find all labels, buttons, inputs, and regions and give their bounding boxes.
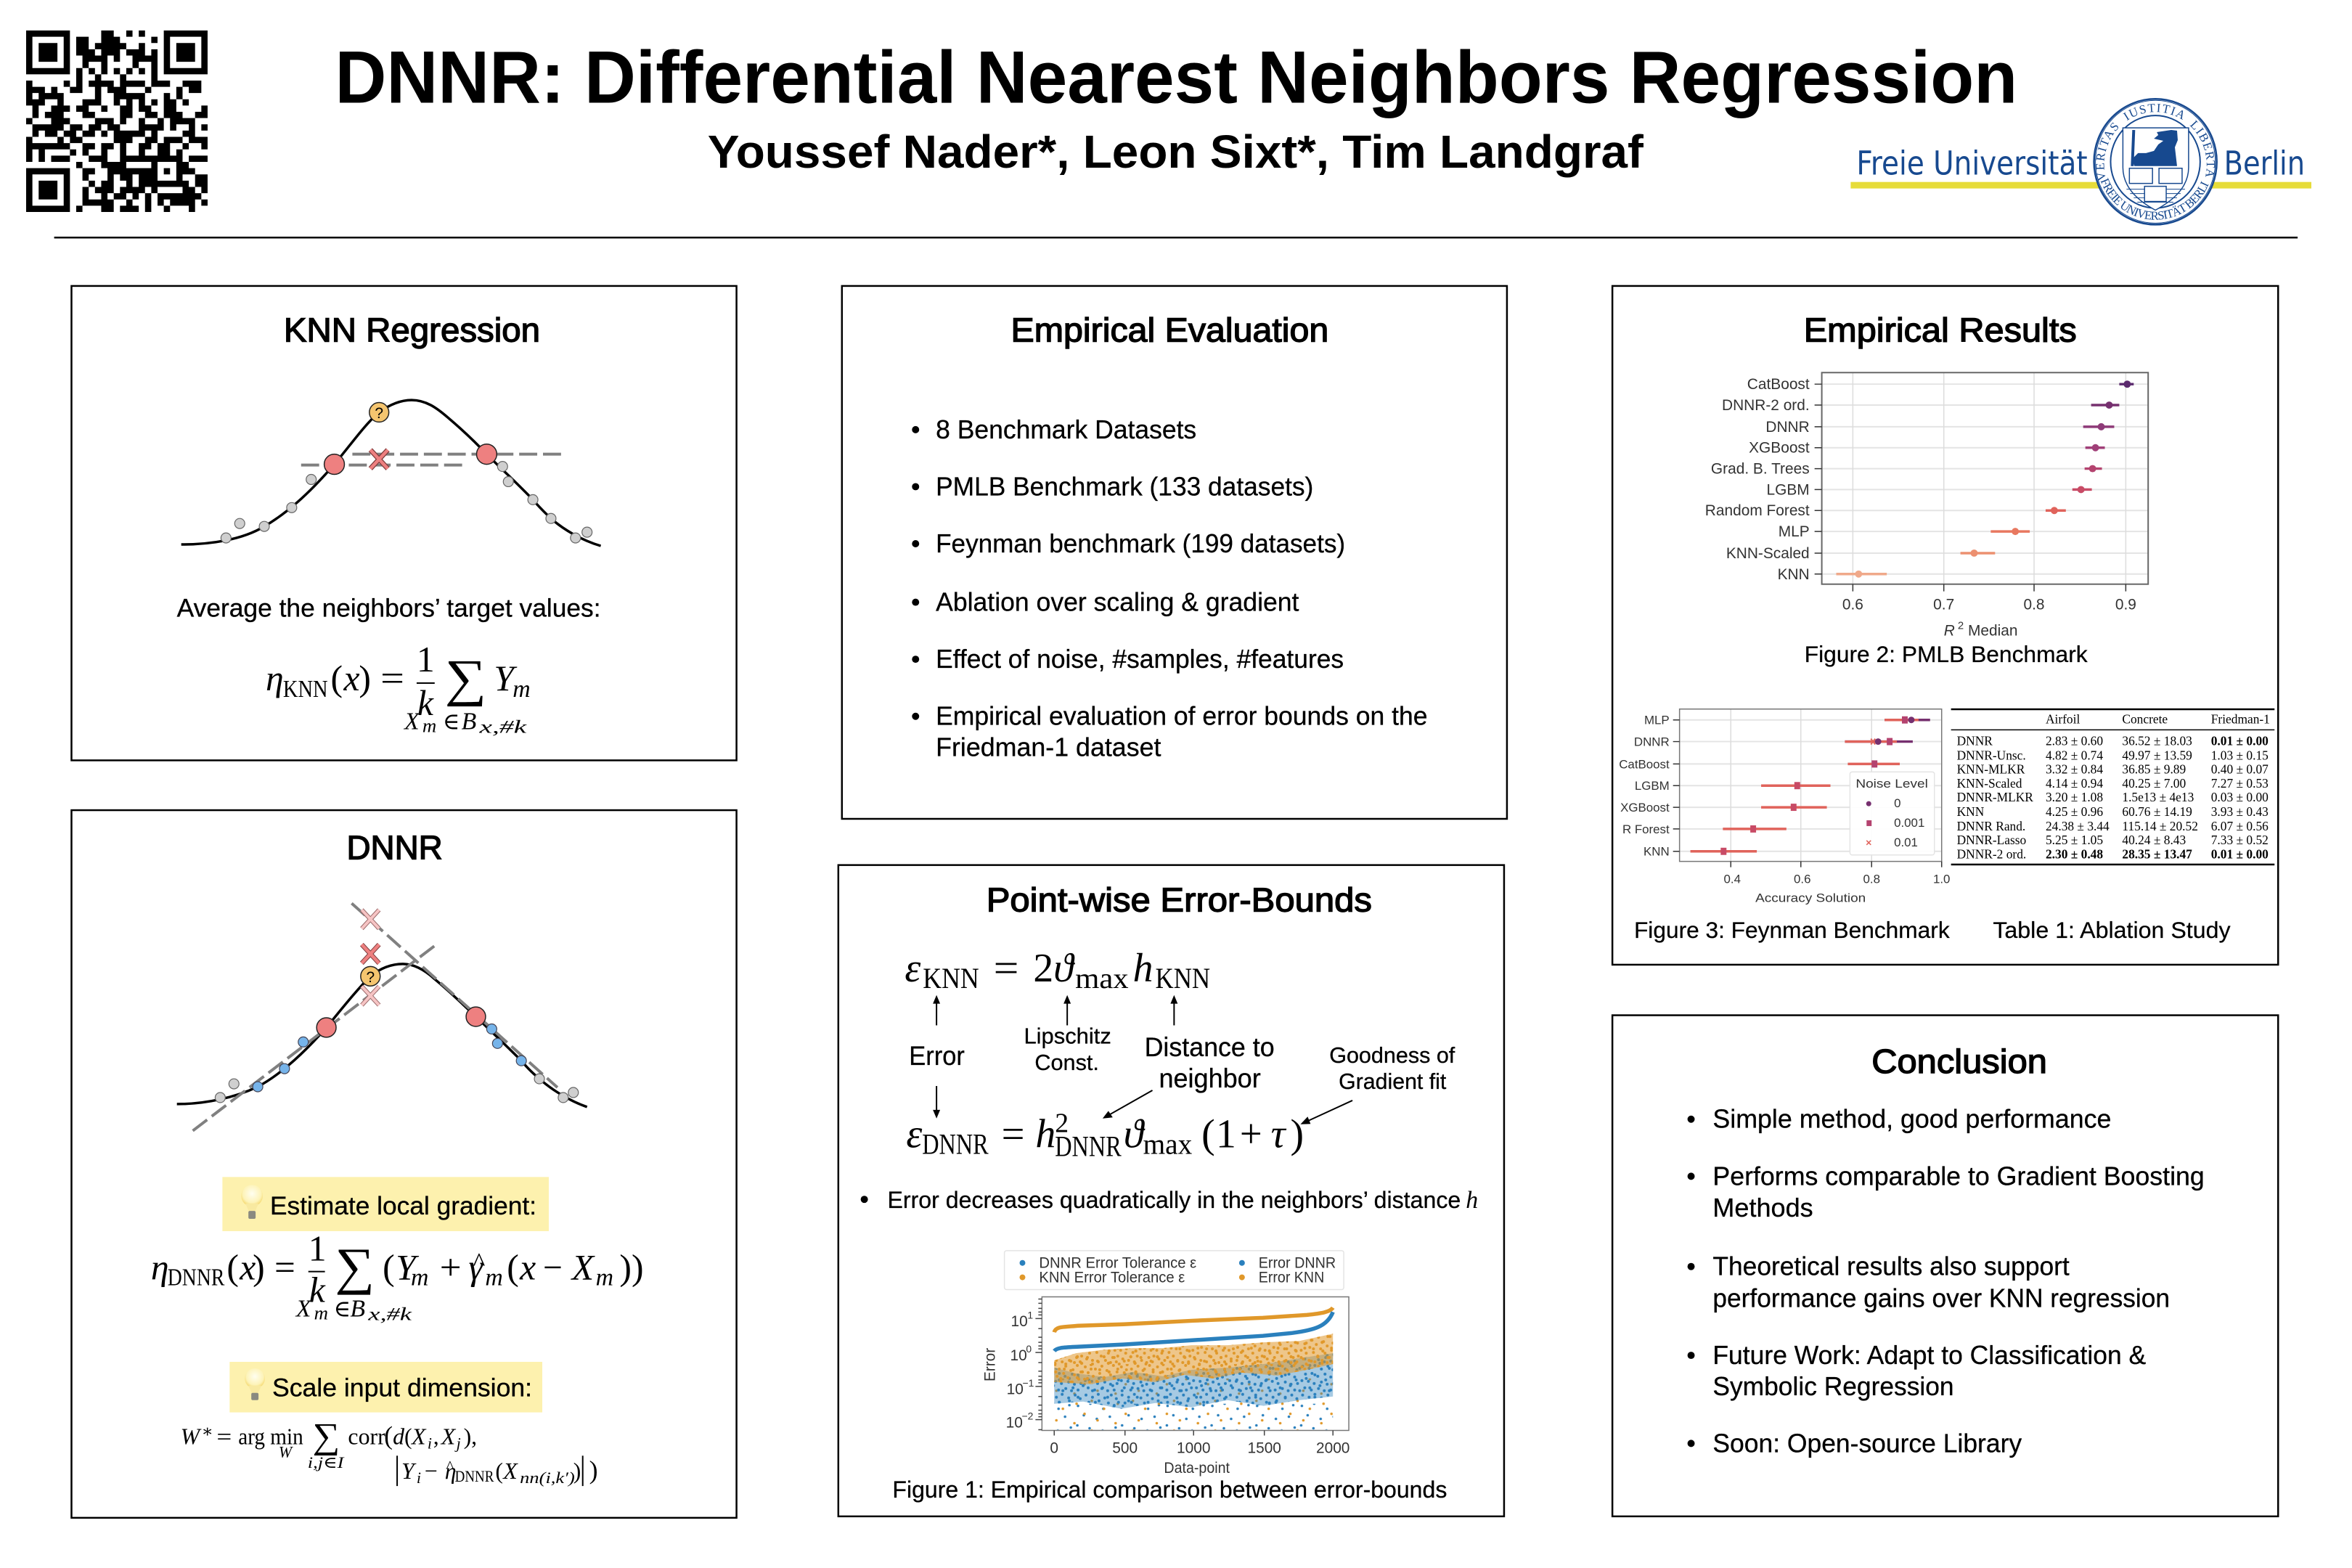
formula: eta DNNR: ( <box>507 1248 519 1288</box>
formula: epsilon DNNR: ϑ <box>1124 1112 1146 1157</box>
table: ablation study: 7.33 ± 0.52 <box>2211 833 2269 847</box>
formula: eta DNNR: m <box>485 1265 503 1291</box>
panel: KNN Regression <box>71 286 737 760</box>
formula: W star: nn(i,k′) <box>520 1469 575 1487</box>
formula: eta KNN: k <box>417 683 434 723</box>
axis labels: 0 <box>1050 1440 1058 1456</box>
formula: eta KNN: ∑ <box>445 650 486 707</box>
text: average neighbors: Average the neighbors’ target values: <box>177 594 601 622</box>
formula: W star: ( <box>495 1458 503 1484</box>
axis labels <box>982 1309 1349 1477</box>
axis labels: 0 <box>1026 1343 1032 1355</box>
axis labels: 1 <box>1027 1309 1033 1320</box>
chart: Feynman benchmark: XGBoost <box>1620 801 1670 814</box>
chart: PMLB benchmark: R <box>1944 622 1955 639</box>
formula: eta DNNR: = <box>274 1248 295 1288</box>
formula: eta DNNR: + <box>440 1248 462 1288</box>
bullet list: Theoretical results also support <box>1712 1252 2070 1281</box>
diagram: KNN curve: ? <box>375 405 383 422</box>
chart: PMLB benchmark: KNN-Scaled <box>1726 545 1810 562</box>
table: ablation study: 1.03 ± 0.15 <box>2211 748 2269 762</box>
chart: PMLB benchmark: DNNR <box>1765 419 1810 436</box>
label: Lipschitz const <box>1024 1023 1111 1075</box>
heading: Empirical Results <box>1804 311 2077 349</box>
table: ablation study: 4.14 ± 0.94 <box>2046 776 2103 791</box>
chart: Feynman benchmark: 0.6 <box>1794 873 1810 886</box>
table: ablation study: 0.01 ± 0.00 <box>2211 734 2269 748</box>
axis labels: −2 <box>1021 1410 1034 1422</box>
table: ablation study: 40.25 ± 7.00 <box>2122 776 2186 791</box>
formula: W star: j <box>454 1434 461 1452</box>
chart: Feynman benchmark: 1.0 <box>1933 873 1950 886</box>
formula: W star: X <box>502 1458 518 1484</box>
chart: PMLB benchmark: DNNR-2 ord. <box>1722 397 1810 414</box>
table: ablation study: 3.32 ± 0.84 <box>2046 761 2103 776</box>
table: ablation study <box>1951 709 2274 865</box>
formula: eta KNN: X <box>403 709 420 735</box>
callout: scale input dimension <box>229 1362 542 1413</box>
bullet list: Ablation over scaling & gradient <box>936 588 1299 617</box>
formula: W star <box>181 1416 598 1487</box>
callout: estimate local gradient: Estimate local gradient: <box>270 1192 536 1220</box>
formula: epsilon DNNR: 1 <box>1216 1112 1236 1157</box>
arrow: distance up <box>1170 995 1177 1025</box>
formula: eta KNN: ( <box>331 658 343 698</box>
authors: Youssef Nader*, Leon Sixt*, Tim Landgraf <box>708 126 1644 178</box>
formula: eta KNN <box>266 640 531 738</box>
formula: W star: = <box>216 1424 232 1449</box>
bullet list: Simple method, good performance <box>1712 1105 2111 1134</box>
logo: Freie Universität Berlin: Berlin <box>2224 144 2305 183</box>
table: ablation study: 3.20 ± 1.08 <box>2046 790 2103 804</box>
chart: PMLB benchmark: Random Forest <box>1705 502 1810 519</box>
formula: W star: − <box>425 1458 438 1484</box>
formula: eta DNNR: ^ <box>473 1248 486 1277</box>
heading: Empirical Evaluation <box>1011 311 1328 349</box>
arrow: to h squared <box>1103 1090 1153 1119</box>
formula: W star: X <box>410 1424 427 1449</box>
label: distance to neighbor: Distance to <box>1145 1032 1275 1062</box>
formula: epsilon DNNR: ( <box>1201 1112 1215 1157</box>
formula: eta KNN: m <box>422 715 436 737</box>
table: ablation study: DNNR-Unsc. <box>1957 748 2026 762</box>
axis labels: −1 <box>1022 1377 1034 1389</box>
formula: W star: ( <box>384 1421 393 1450</box>
axis labels: 500 <box>1112 1440 1138 1456</box>
panel: DNNR <box>71 810 737 1518</box>
arrow: to tau <box>1300 1101 1352 1124</box>
table: ablation study: 3.93 ± 0.43 <box>2211 804 2269 819</box>
formula: eta DNNR: X <box>571 1248 595 1288</box>
panel: Empirical Results <box>1612 286 2278 965</box>
callout: scale input dimension: Scale input dimension: <box>272 1374 532 1402</box>
chart: PMLB benchmark: 2 <box>1955 619 1964 632</box>
formula: eta DNNR: γ <box>469 1248 484 1288</box>
formula: eta DNNR: ( <box>226 1248 239 1288</box>
formula: eta KNN: x,#k <box>478 718 528 738</box>
chart: PMLB benchmark: LGBM <box>1767 481 1810 498</box>
bullet list <box>912 415 1427 761</box>
chart: PMLB benchmark: CatBoost <box>1747 376 1810 393</box>
formula: W star: ( <box>404 1424 412 1449</box>
panel: Empirical Evaluation <box>842 286 1507 819</box>
table: ablation study: Friedman-1 <box>2211 712 2270 727</box>
legend <box>1005 1251 1344 1290</box>
plot area <box>1035 1297 1349 1435</box>
formula: eta DNNR: Y <box>396 1248 420 1288</box>
formula: W star: W <box>279 1443 293 1461</box>
table: ablation study: 5.25 ± 1.05 <box>2046 833 2103 847</box>
formula: epsilon DNNR: + <box>1240 1112 1262 1157</box>
chart: PMLB benchmark: 0.9 <box>2115 597 2136 613</box>
formula: W star: i <box>417 1469 421 1487</box>
formula: W star: X <box>440 1424 457 1449</box>
arrow: lipschitz up <box>1063 995 1071 1025</box>
legend: noise level: 0 <box>1894 796 1900 810</box>
formula: epsilon KNN: 2 <box>1033 946 1053 991</box>
table: ablation study: 24.38 ± 3.44 <box>2046 819 2110 833</box>
formula: eta KNN: KNN <box>283 676 328 703</box>
callout: estimate local gradient <box>222 1177 549 1231</box>
label: Lipschitz const: Lipschitz <box>1024 1023 1111 1048</box>
formula: eta DNNR: m <box>411 1265 428 1291</box>
formula: eta DNNR: B <box>350 1295 365 1322</box>
caption: figure 3: Figure 3: Feynman Benchmark <box>1634 917 1950 943</box>
heading: Point-wise Error-Bounds <box>987 881 1372 918</box>
formula: eta KNN: x <box>343 658 360 698</box>
formula: W star: ), <box>464 1424 477 1449</box>
bullet list: PMLB Benchmark (133 datasets) <box>936 472 1313 501</box>
formula: eta DNNR: )) <box>619 1248 644 1288</box>
legend: Error DNNR <box>1259 1255 1336 1272</box>
icon: light bulb <box>245 1368 265 1400</box>
bullet list: Symbolic Regression <box>1712 1372 1954 1401</box>
formula: eta DNNR: ∈ <box>334 1296 351 1321</box>
formula: eta KNN: = <box>380 658 404 698</box>
formula: W star: ^ <box>446 1458 454 1475</box>
formula: W star: arg min <box>238 1424 303 1449</box>
bullet list: Performs comparable to Gradient Boosting <box>1712 1161 2205 1191</box>
formula: eta DNNR <box>151 1229 644 1324</box>
formula: epsilon DNNR: = <box>1002 1112 1024 1157</box>
chart: Feynman benchmark: DNNR <box>1634 735 1670 749</box>
formula: W star: i <box>428 1434 432 1452</box>
chart: error comparison scatter <box>982 1251 1349 1477</box>
axis labels: Data-point <box>1164 1460 1230 1477</box>
formula: epsilon KNN: ε <box>905 946 920 991</box>
caption: table 1: Table 1: Ablation Study <box>1993 917 2231 943</box>
logo: Freie Universität Berlin <box>1850 98 2311 226</box>
QR code <box>26 30 208 212</box>
icon: light bulb <box>241 1185 263 1219</box>
formula: epsilon DNNR: τ <box>1271 1112 1287 1157</box>
heading: KNN Regression <box>284 311 540 349</box>
table: ablation study: 40.24 ± 8.43 <box>2122 833 2186 847</box>
heading: DNNR <box>346 829 443 867</box>
bullet list: 8 Benchmark Datasets <box>936 415 1196 444</box>
chart: Feynman benchmark: MLP <box>1644 714 1670 727</box>
formula: epsilon KNN: KNN <box>1156 963 1210 995</box>
table: ablation study: 49.97 ± 13.59 <box>2122 748 2192 762</box>
axis labels: 1000 <box>1177 1440 1210 1456</box>
chart: PMLB benchmark: Grad. B. Trees <box>1711 461 1810 478</box>
chart: Feynman benchmark: Accuracy Solution <box>1755 891 1866 905</box>
formula: epsilon DNNR: ) <box>1291 1112 1304 1157</box>
formula: W star: ∗ <box>202 1422 213 1441</box>
chart: PMLB benchmark: Median <box>1964 622 2017 639</box>
formula: W star: Y <box>401 1458 417 1484</box>
axis labels: 10 <box>1010 1347 1027 1364</box>
formula: eta KNN: ) <box>359 658 371 698</box>
formula: W star: W <box>181 1424 202 1449</box>
chart: Feynman benchmark <box>1619 709 1950 905</box>
panel: Conclusion <box>1612 1016 2278 1516</box>
legend: noise level: 0.01 <box>1894 836 1918 849</box>
bullet list: Friedman-1 dataset <box>936 732 1161 761</box>
table: ablation study: 36.85 ± 9.89 <box>2122 761 2186 776</box>
chart: PMLB benchmark: 0.7 <box>1933 597 1954 613</box>
legend: noise level <box>1850 772 1935 855</box>
formula: epsilon DNNR: max <box>1143 1129 1192 1161</box>
bullet list: Methods <box>1712 1193 1813 1222</box>
table: ablation study: 4.25 ± 0.96 <box>2046 804 2103 819</box>
chart: Feynman benchmark: 0.4 <box>1724 873 1741 886</box>
formula: eta DNNR: k <box>309 1270 326 1310</box>
formula: eta KNN: B <box>462 709 476 735</box>
diagram: DNNR curve: ? <box>366 969 375 986</box>
label: goodness of gradient fit <box>1329 1042 1455 1094</box>
label: goodness of gradient fit: Gradient fit <box>1339 1069 1447 1094</box>
formula: eta KNN: ∈ <box>443 709 460 735</box>
chart: Feynman benchmark: R Forest <box>1622 822 1670 836</box>
chart: Feynman benchmark: 0.8 <box>1863 873 1880 886</box>
legend: noise level: Noise Level <box>1855 777 1928 791</box>
title: DNNR: Differential Nearest Neighbors Regression <box>335 35 2017 118</box>
formula: W star: i,j∈I <box>308 1454 346 1471</box>
table: ablation study: 60.76 ± 14.19 <box>2122 804 2192 819</box>
legend: Error KNN <box>1259 1270 1324 1286</box>
legend: KNN Error Tolerance ε <box>1039 1270 1185 1286</box>
table: ablation study: KNN-Scaled <box>1957 776 2022 791</box>
table: ablation study: 4.82 ± 0.74 <box>2046 748 2103 762</box>
formula: epsilon DNNR: DNNR <box>1055 1131 1122 1163</box>
chart: PMLB benchmark: KNN <box>1778 566 1810 583</box>
bullet list: Empirical evaluation of error bounds on the <box>936 702 1427 731</box>
chart: PMLB benchmark: MLP <box>1779 523 1810 540</box>
formula: epsilon KNN: max <box>1075 963 1129 995</box>
formula: eta DNNR: m <box>596 1265 613 1291</box>
caption: figure 1: Figure 1: Empirical comparison between error-bounds <box>892 1476 1447 1503</box>
bullet list <box>1688 1105 2205 1458</box>
axis labels: 10 <box>1006 1415 1023 1432</box>
table: ablation study: KNN <box>1957 804 1985 819</box>
formula: epsilon KNN: = <box>994 946 1019 991</box>
arrow: error up <box>933 995 940 1025</box>
bullet list: Soon: Open-source Library <box>1712 1429 2022 1458</box>
label: Lipschitz const: Const. <box>1034 1050 1099 1075</box>
formula: W star: η <box>445 1458 457 1484</box>
bullet list: Future Work: Adapt to Classification & <box>1712 1341 2146 1370</box>
legend: noise level: 0.001 <box>1894 816 1924 830</box>
formula: eta KNN: m <box>513 676 531 703</box>
table: ablation study: DNNR-MLKR <box>1957 790 2033 804</box>
chart: Feynman benchmark: KNN <box>1643 845 1670 859</box>
formula: eta DNNR: m <box>314 1302 328 1323</box>
chart: PMLB benchmark: 0.8 <box>2024 597 2045 613</box>
table: ablation study: 6.07 ± 0.56 <box>2211 819 2269 833</box>
formula: eta DNNR: ∑ <box>335 1238 375 1296</box>
diagram: DNNR curve <box>177 903 587 1131</box>
axis labels: 1500 <box>1247 1440 1281 1456</box>
formula: W star: corr <box>348 1424 385 1449</box>
formula: epsilon DNNR: 2 <box>1055 1108 1069 1139</box>
formula: eta DNNR: x <box>239 1248 256 1288</box>
formula: eta KNN: η <box>266 658 284 698</box>
table: ablation study: 2.30 ± 0.48 <box>2046 847 2103 862</box>
formula: eta DNNR: ) <box>253 1248 265 1288</box>
formula: epsilon DNNR <box>906 1108 1304 1163</box>
header rule <box>54 237 2298 239</box>
chart: Feynman benchmark: CatBoost <box>1619 757 1670 771</box>
label: distance to neighbor: neighbor <box>1159 1063 1261 1093</box>
chart: Feynman benchmark: LGBM <box>1635 779 1670 793</box>
table: ablation study: 0.40 ± 0.07 <box>2211 761 2269 776</box>
formula: epsilon KNN: KNN <box>923 963 979 995</box>
formula: W star: ) <box>573 1458 581 1484</box>
formula: W star: DNNR <box>455 1468 494 1485</box>
formula: epsilon DNNR: ε <box>906 1112 922 1157</box>
table: ablation study: DNNR-2 ord. <box>1957 847 2026 862</box>
table: ablation study: 0.03 ± 0.00 <box>2211 790 2269 804</box>
caption: figure 2: Figure 2: PMLB Benchmark <box>1805 641 2088 667</box>
formula: epsilon KNN <box>905 946 1210 995</box>
axis labels: 2000 <box>1316 1440 1349 1456</box>
formula: epsilon DNNR: h <box>1035 1112 1055 1157</box>
formula: epsilon DNNR: DNNR <box>922 1129 989 1161</box>
formula: eta KNN: Y <box>494 658 518 698</box>
bullet: error decreases: Error decreases quadratically in the neighbors’ distance <box>887 1186 1461 1213</box>
axis labels: 10 <box>1007 1381 1024 1398</box>
formula: eta DNNR: x,#k <box>367 1304 412 1324</box>
table: ablation study: KNN-MLKR <box>1957 761 2025 776</box>
table: ablation study: 0.01 ± 0.00 <box>2211 847 2269 862</box>
formula: eta DNNR: X <box>295 1295 312 1322</box>
chart: PMLB benchmark <box>1705 372 2148 639</box>
formula: epsilon KNN: h <box>1133 946 1153 991</box>
bullet list: Effect of noise, #samples, #features <box>936 645 1344 674</box>
legend: DNNR Error Tolerance ε <box>1039 1255 1196 1272</box>
formula: W star: ∑ <box>313 1416 340 1455</box>
axis labels: Error <box>982 1348 999 1381</box>
table: ablation study: DNNR Rand. <box>1957 819 2025 833</box>
formula: W star: d <box>393 1424 404 1449</box>
axis labels: 10 <box>1011 1313 1028 1330</box>
formula: eta DNNR: ( <box>383 1248 395 1288</box>
formula: eta DNNR: − <box>543 1248 563 1288</box>
label: goodness of gradient fit: Goodness of <box>1329 1042 1455 1068</box>
formula: eta DNNR: η <box>151 1248 169 1288</box>
diagram: KNN curve <box>181 400 601 546</box>
table: ablation study: 2.83 ± 0.60 <box>2046 734 2103 748</box>
formula: W star: ) <box>589 1455 598 1485</box>
table: ablation study: Airfoil <box>2046 712 2080 727</box>
table: ablation study: 36.52 ± 18.03 <box>2122 734 2192 748</box>
table: ablation study: 1.5e13 ± 4e13 <box>2122 790 2194 804</box>
formula: eta KNN: 1 <box>417 640 435 679</box>
table: ablation study: 7.27 ± 0.53 <box>2211 776 2269 791</box>
panel: Point-wise Error-Bounds <box>838 865 1504 1516</box>
arrow: error down <box>933 1086 940 1119</box>
formula: epsilon KNN: ϑ <box>1053 946 1075 991</box>
chart: PMLB benchmark: XGBoost <box>1749 440 1810 457</box>
table: ablation study: DNNR-Lasso <box>1957 833 2027 847</box>
bullet list: performance gains over KNN regression <box>1712 1283 2170 1312</box>
table: ablation study: 115.14 ± 20.52 <box>2122 819 2198 833</box>
bullet list: Feynman benchmark (199 datasets) <box>936 529 1345 558</box>
table: ablation study: 28.35 ± 13.47 <box>2122 847 2192 862</box>
formula: eta DNNR: 1 <box>309 1229 327 1269</box>
bullet: error decreases: h <box>1466 1187 1478 1214</box>
heading: Conclusion <box>1871 1042 2047 1080</box>
label: error: Error <box>909 1041 965 1071</box>
logo: Freie Universität Berlin: Freie Universität <box>1856 144 2088 183</box>
table: ablation study: Concrete <box>2122 712 2168 727</box>
formula: eta DNNR: x <box>519 1248 536 1288</box>
formula: eta DNNR: DNNR <box>168 1265 225 1291</box>
chart: PMLB benchmark: 0.6 <box>1842 597 1863 613</box>
label: distance to neighbor <box>1145 1032 1275 1093</box>
table: ablation study: DNNR <box>1957 734 1993 748</box>
formula: W star: , <box>433 1424 439 1449</box>
